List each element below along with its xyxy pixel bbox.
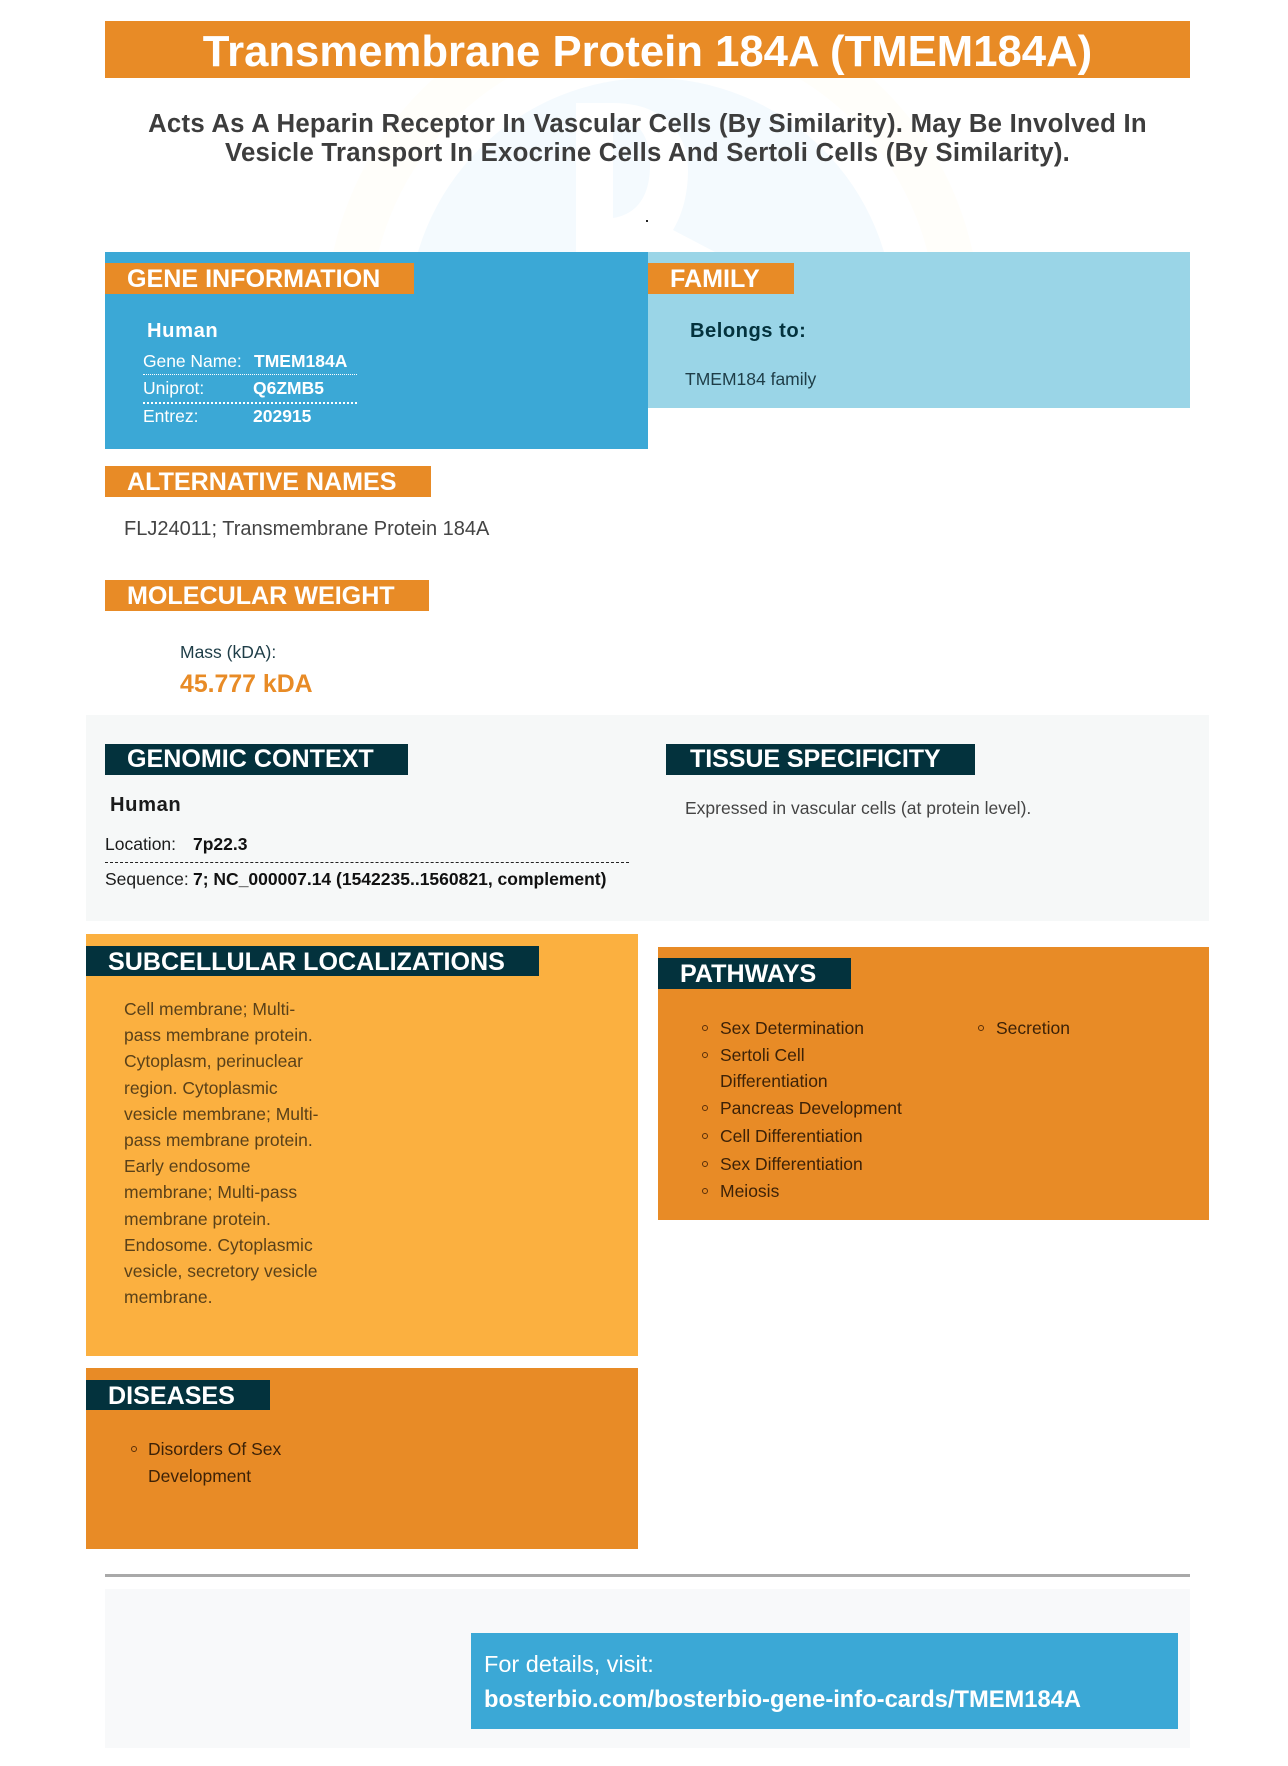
heading: subcellular localizations: SUBCELLULAR LOCALIZATIONS <box>108 948 505 976</box>
small dot <box>646 220 648 222</box>
callout label: For details, visit: <box>484 1651 654 1677</box>
subtitle <box>148 110 1147 167</box>
subtitle: Vesicle Transport In Exocrine Cells And Sertoli Cells (By Similarity). <box>225 139 1070 167</box>
disease item continuation: Development <box>148 1466 251 1486</box>
panel: diseases <box>86 1368 638 1549</box>
pathway list <box>702 1018 1070 1201</box>
pathway item: Sex Determination <box>720 1018 864 1038</box>
species: Human <box>110 794 181 816</box>
localization text: membrane protein. <box>124 1209 271 1229</box>
heading: molecular weight: MOLECULAR WEIGHT <box>127 582 395 610</box>
pathway item: Sex Differentiation <box>720 1154 863 1174</box>
uniprot value: Q6ZMB5 <box>253 378 324 398</box>
panel: gene information <box>105 252 648 449</box>
localization text: membrane; Multi-pass <box>124 1182 297 1202</box>
sequence: Sequence: <box>105 869 189 889</box>
mass label: Mass (kDA): <box>180 642 276 662</box>
heading: genomic context: GENOMIC CONTEXT <box>127 745 374 773</box>
location value: 7p22.3 <box>193 834 247 854</box>
heading: pathways: PATHWAYS <box>680 960 816 988</box>
species: Human <box>147 320 218 342</box>
localization text: membrane. <box>124 1287 213 1307</box>
sequence value: 7; NC_000007.14 (1542235..1560821, complement) <box>193 869 606 889</box>
localization text: Cytoplasm, perinuclear <box>124 1051 303 1071</box>
panel: family <box>648 252 1190 408</box>
disease item: Disorders Of Sex <box>148 1439 281 1459</box>
heading: gene information: GENE INFORMATION <box>127 265 380 293</box>
pathway item: Meiosis <box>720 1181 779 1201</box>
panel: footer <box>105 1589 1190 1748</box>
localization text: vesicle, secretory vesicle <box>124 1261 318 1281</box>
gene name: Gene Name: <box>143 351 242 371</box>
heading: tissue specificity: TISSUE SPECIFICITY <box>690 745 941 773</box>
heading: pathways <box>658 958 851 989</box>
panel: subcellular localizations <box>86 934 638 1356</box>
tissue text: Expressed in vascular cells (at protein level). <box>685 798 1031 818</box>
callout: details link <box>471 1633 1178 1729</box>
title banner <box>105 21 1190 78</box>
localization text: pass membrane protein. <box>124 1130 313 1150</box>
heading: alternative names: ALTERNATIVE NAMES <box>127 468 397 496</box>
callout url: bosterbio.com/bosterbio-gene-info-cards/TMEM184A <box>484 1687 1081 1713</box>
pathway item: Sertoli Cell <box>720 1045 805 1065</box>
localization text: Endosome. Cytoplasmic <box>124 1235 313 1255</box>
pathway item continuation: Differentiation <box>720 1071 828 1091</box>
uniprot: Uniprot: <box>143 378 204 398</box>
entrez: Entrez: <box>143 406 198 426</box>
alternative names text: FLJ24011; Transmembrane Protein 184A <box>124 518 489 540</box>
localization text <box>124 999 318 1307</box>
mass value: 45.777 kDA <box>180 671 313 698</box>
location: Location: <box>105 834 176 854</box>
title: Transmembrane Protein 184A (TMEM184A) <box>203 27 1092 76</box>
heading: family <box>648 263 794 294</box>
heading: diseases <box>86 1380 270 1410</box>
localization text: region. Cytoplasmic <box>124 1078 278 1098</box>
gene name value: TMEM184A <box>254 351 347 371</box>
localization text: Cell membrane; Multi- <box>124 999 295 1019</box>
pathway item: Pancreas Development <box>720 1098 902 1118</box>
panel: genomic context and tissue specificity <box>86 715 1209 921</box>
heading: family: FAMILY <box>670 265 760 293</box>
localization text: pass membrane protein. <box>124 1025 313 1045</box>
watermark logo <box>418 78 884 252</box>
pathway item: Secretion <box>996 1018 1070 1038</box>
heading: diseases: DISEASES <box>108 1382 235 1410</box>
localization text: vesicle membrane; Multi- <box>124 1104 318 1124</box>
entrez value: 202915 <box>253 406 311 426</box>
panel: pathways <box>658 947 1209 1220</box>
family text: TMEM184 family <box>685 369 816 389</box>
localization text: Early endosome <box>124 1156 250 1176</box>
belongs to: Belongs to: <box>690 320 806 342</box>
subtitle: Acts As A Heparin Receptor In Vascular Cells (By Similarity). May Be Involved In <box>148 110 1147 138</box>
pathway item: Cell Differentiation <box>720 1126 863 1146</box>
